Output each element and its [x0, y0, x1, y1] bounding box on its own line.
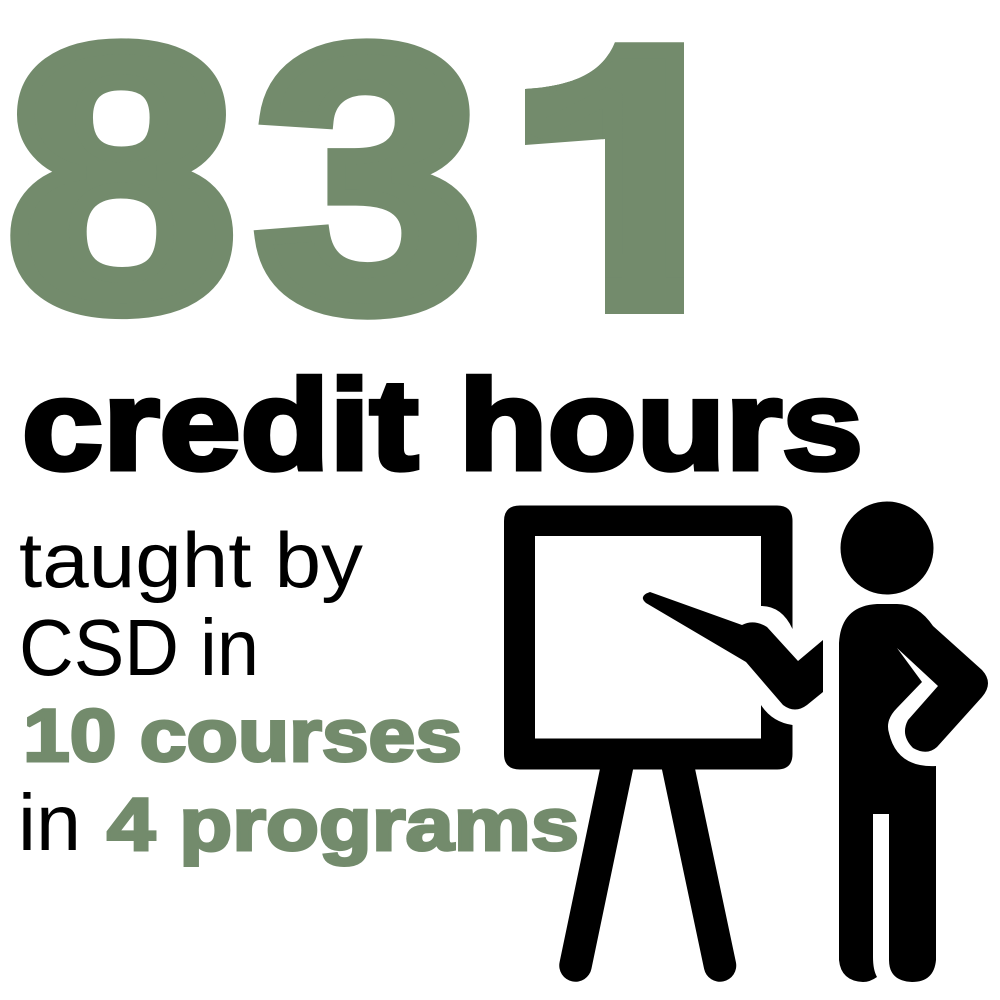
text: taught by: taught by	[19, 516, 363, 604]
text: 10 courses: 10 courses	[23, 694, 462, 777]
text: in 4 programs: 4 programs	[107, 783, 579, 866]
pointer arm	[643, 592, 823, 710]
text: in 4 programs: in	[18, 778, 81, 867]
big number 831	[10, 38, 684, 320]
board frame	[504, 506, 792, 770]
text: CSD in: CSD in	[19, 603, 259, 692]
head	[840, 502, 934, 594]
text: in 4 programs	[18, 778, 579, 867]
body	[839, 604, 988, 982]
icon: teacher at presentation board	[504, 502, 988, 982]
easel legs	[576, 762, 720, 966]
heading: credit hours: credit hours	[22, 354, 863, 497]
